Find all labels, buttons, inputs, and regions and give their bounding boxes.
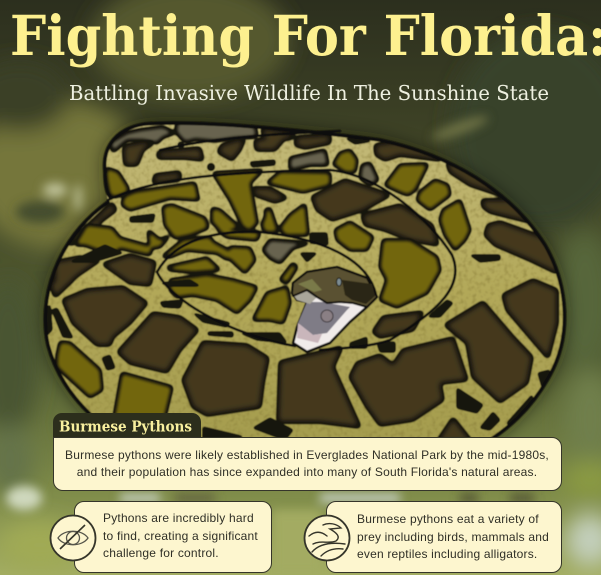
diet text: Burmese pythons eat a variety of (357, 512, 539, 526)
subtitle: Battling Invasive Wildlife In The Sunshine State (69, 81, 549, 105)
overview line one: Burmese pythons were likely established in Everglades National Park by the mid-1980s, (65, 448, 549, 462)
heading tab: Burmese Pythons: Burmese Pythons (59, 418, 192, 436)
hard to find text: to find, creating a significant (103, 528, 258, 542)
coil outlines (45, 123, 565, 440)
snake head and open mouth (292, 267, 377, 352)
title: Fighting For Florida: (10, 3, 601, 68)
panel: overview text (53, 437, 562, 491)
hard to find text: challenge for control. (103, 546, 219, 560)
icon: crossed-out eye (50, 514, 96, 562)
heading tab: Burmese Pythons (53, 413, 201, 437)
diet text (357, 512, 549, 561)
diet text: prey including birds, mammals and (357, 530, 549, 544)
hard to find text (103, 511, 258, 560)
coiled Burmese python illustration (43, 120, 567, 437)
hard to find text: Pythons are incredibly hard (103, 511, 254, 525)
panel: diet (326, 501, 562, 573)
diet text: even reptiles including alligators. (357, 547, 537, 561)
icon: python and prey (304, 514, 350, 562)
snake body base (45, 123, 565, 450)
snake shadow (45, 123, 565, 450)
snake scale patches (46, 124, 564, 437)
overview line two: and their population has since expanded into many of South Florida's natural areas. (77, 465, 537, 479)
panel: hard to find (74, 501, 272, 573)
